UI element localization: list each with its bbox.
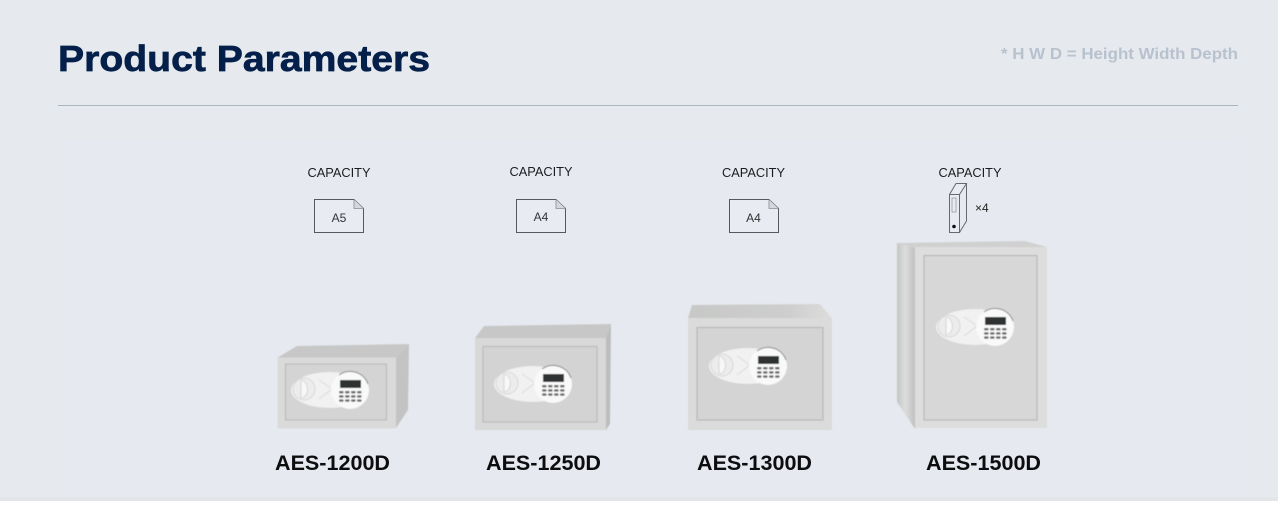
capacity label: CAPACITY (510, 164, 573, 179)
capacity label: CAPACITY (308, 165, 371, 180)
icon: A4 document (730, 200, 778, 232)
note: HWD definition: * H W D = Height Width Depth (1001, 46, 1238, 63)
icon: A5 document: A5 (332, 211, 347, 225)
panel: AES-1200D (275, 165, 409, 475)
icon: binder x4 (950, 184, 989, 232)
model name: AES-1250D (486, 452, 601, 475)
safe: AES-1500D (897, 241, 1047, 429)
title: Product Parameters (58, 38, 430, 79)
icon: A4 document: A4 (746, 211, 761, 225)
icon: A4 document (516, 200, 566, 232)
panel: AES-1300D (688, 165, 832, 475)
model name: AES-1500D (926, 452, 1041, 475)
capacity label: CAPACITY (722, 165, 785, 180)
panel: AES-1500D (897, 165, 1047, 475)
model name: AES-1300D (697, 452, 812, 475)
icon: A4 document: A4 (534, 210, 549, 224)
capacity label: CAPACITY (938, 165, 1002, 180)
safe: AES-1300D (688, 304, 832, 430)
safe: AES-1250D (475, 324, 611, 430)
panel: AES-1250D (475, 164, 611, 475)
icon: A5 document (314, 200, 364, 232)
safe: AES-1200D (277, 344, 409, 428)
model name: AES-1200D (275, 452, 390, 475)
icon: binder x4: ×4 (975, 201, 989, 215)
